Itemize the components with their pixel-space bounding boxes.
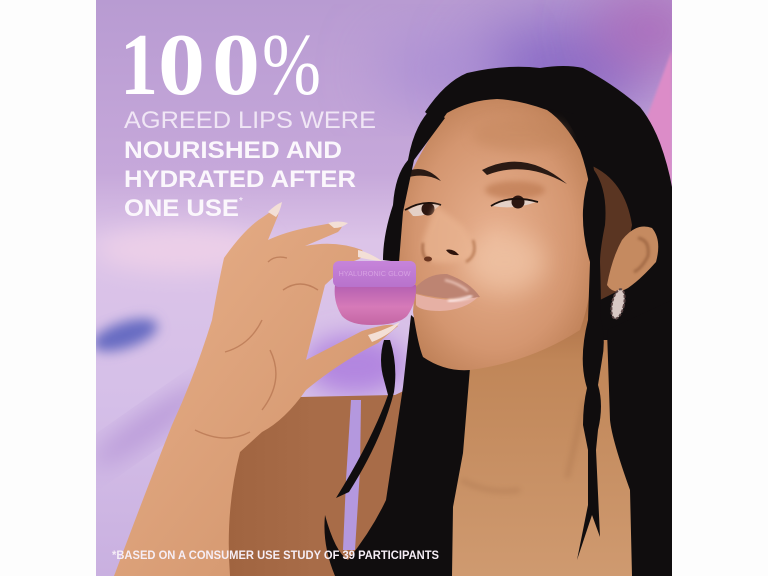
inner ear shading xyxy=(634,238,648,272)
collarbone shadow xyxy=(461,400,585,491)
bubble braid: right strand xyxy=(560,110,606,560)
left eyebrow xyxy=(405,169,441,181)
statistic: 100% xyxy=(120,17,321,114)
face xyxy=(397,99,593,370)
long dark hair xyxy=(324,66,672,576)
cheek highlight xyxy=(465,232,545,292)
palm creases xyxy=(195,257,318,438)
jar body xyxy=(335,285,416,325)
hair crown xyxy=(425,66,672,340)
hair fall, right xyxy=(607,300,672,576)
nose xyxy=(423,205,474,263)
glossy lips xyxy=(415,274,480,311)
infographic canvas xyxy=(96,0,672,576)
right eyebrow xyxy=(482,162,567,184)
jar lid xyxy=(333,261,416,287)
heading: one use: * xyxy=(239,196,243,207)
neck and chest xyxy=(450,290,634,576)
fingernails xyxy=(268,202,400,342)
statistic: 100%: 0 xyxy=(212,17,260,114)
woman's torso and shoulder xyxy=(160,360,470,576)
statistic: 100%: 0 xyxy=(158,17,205,114)
footnote: *BASED ON A CONSUMER USE STUDY OF 39 PARTICIPANTS xyxy=(112,550,439,562)
heading: one use: ONE USE xyxy=(124,195,234,222)
jar label: HYALURONIC GLOW xyxy=(338,271,411,278)
statistic: 100%: % xyxy=(262,17,321,114)
heading: nourished and: NOURISHED AND xyxy=(124,137,342,164)
bubble braid: left strand xyxy=(336,108,445,498)
temple skin under thin hair xyxy=(590,165,632,300)
ear xyxy=(607,226,658,291)
heading: agreed lips were: AGREED LIPS WERE xyxy=(124,107,376,134)
hair behind neck, left xyxy=(324,315,470,576)
eyeshadow xyxy=(485,181,545,199)
arm and hand xyxy=(114,202,400,576)
right eye xyxy=(491,196,538,208)
statistic: 100%: 1 xyxy=(120,17,158,114)
heading: hydrated after: HYDRATED AFTER xyxy=(124,166,356,193)
lilac bra strap xyxy=(343,400,361,550)
left eye xyxy=(405,202,441,216)
lip balm jar xyxy=(333,261,416,325)
forehead shading xyxy=(472,119,568,151)
earring xyxy=(609,288,627,320)
